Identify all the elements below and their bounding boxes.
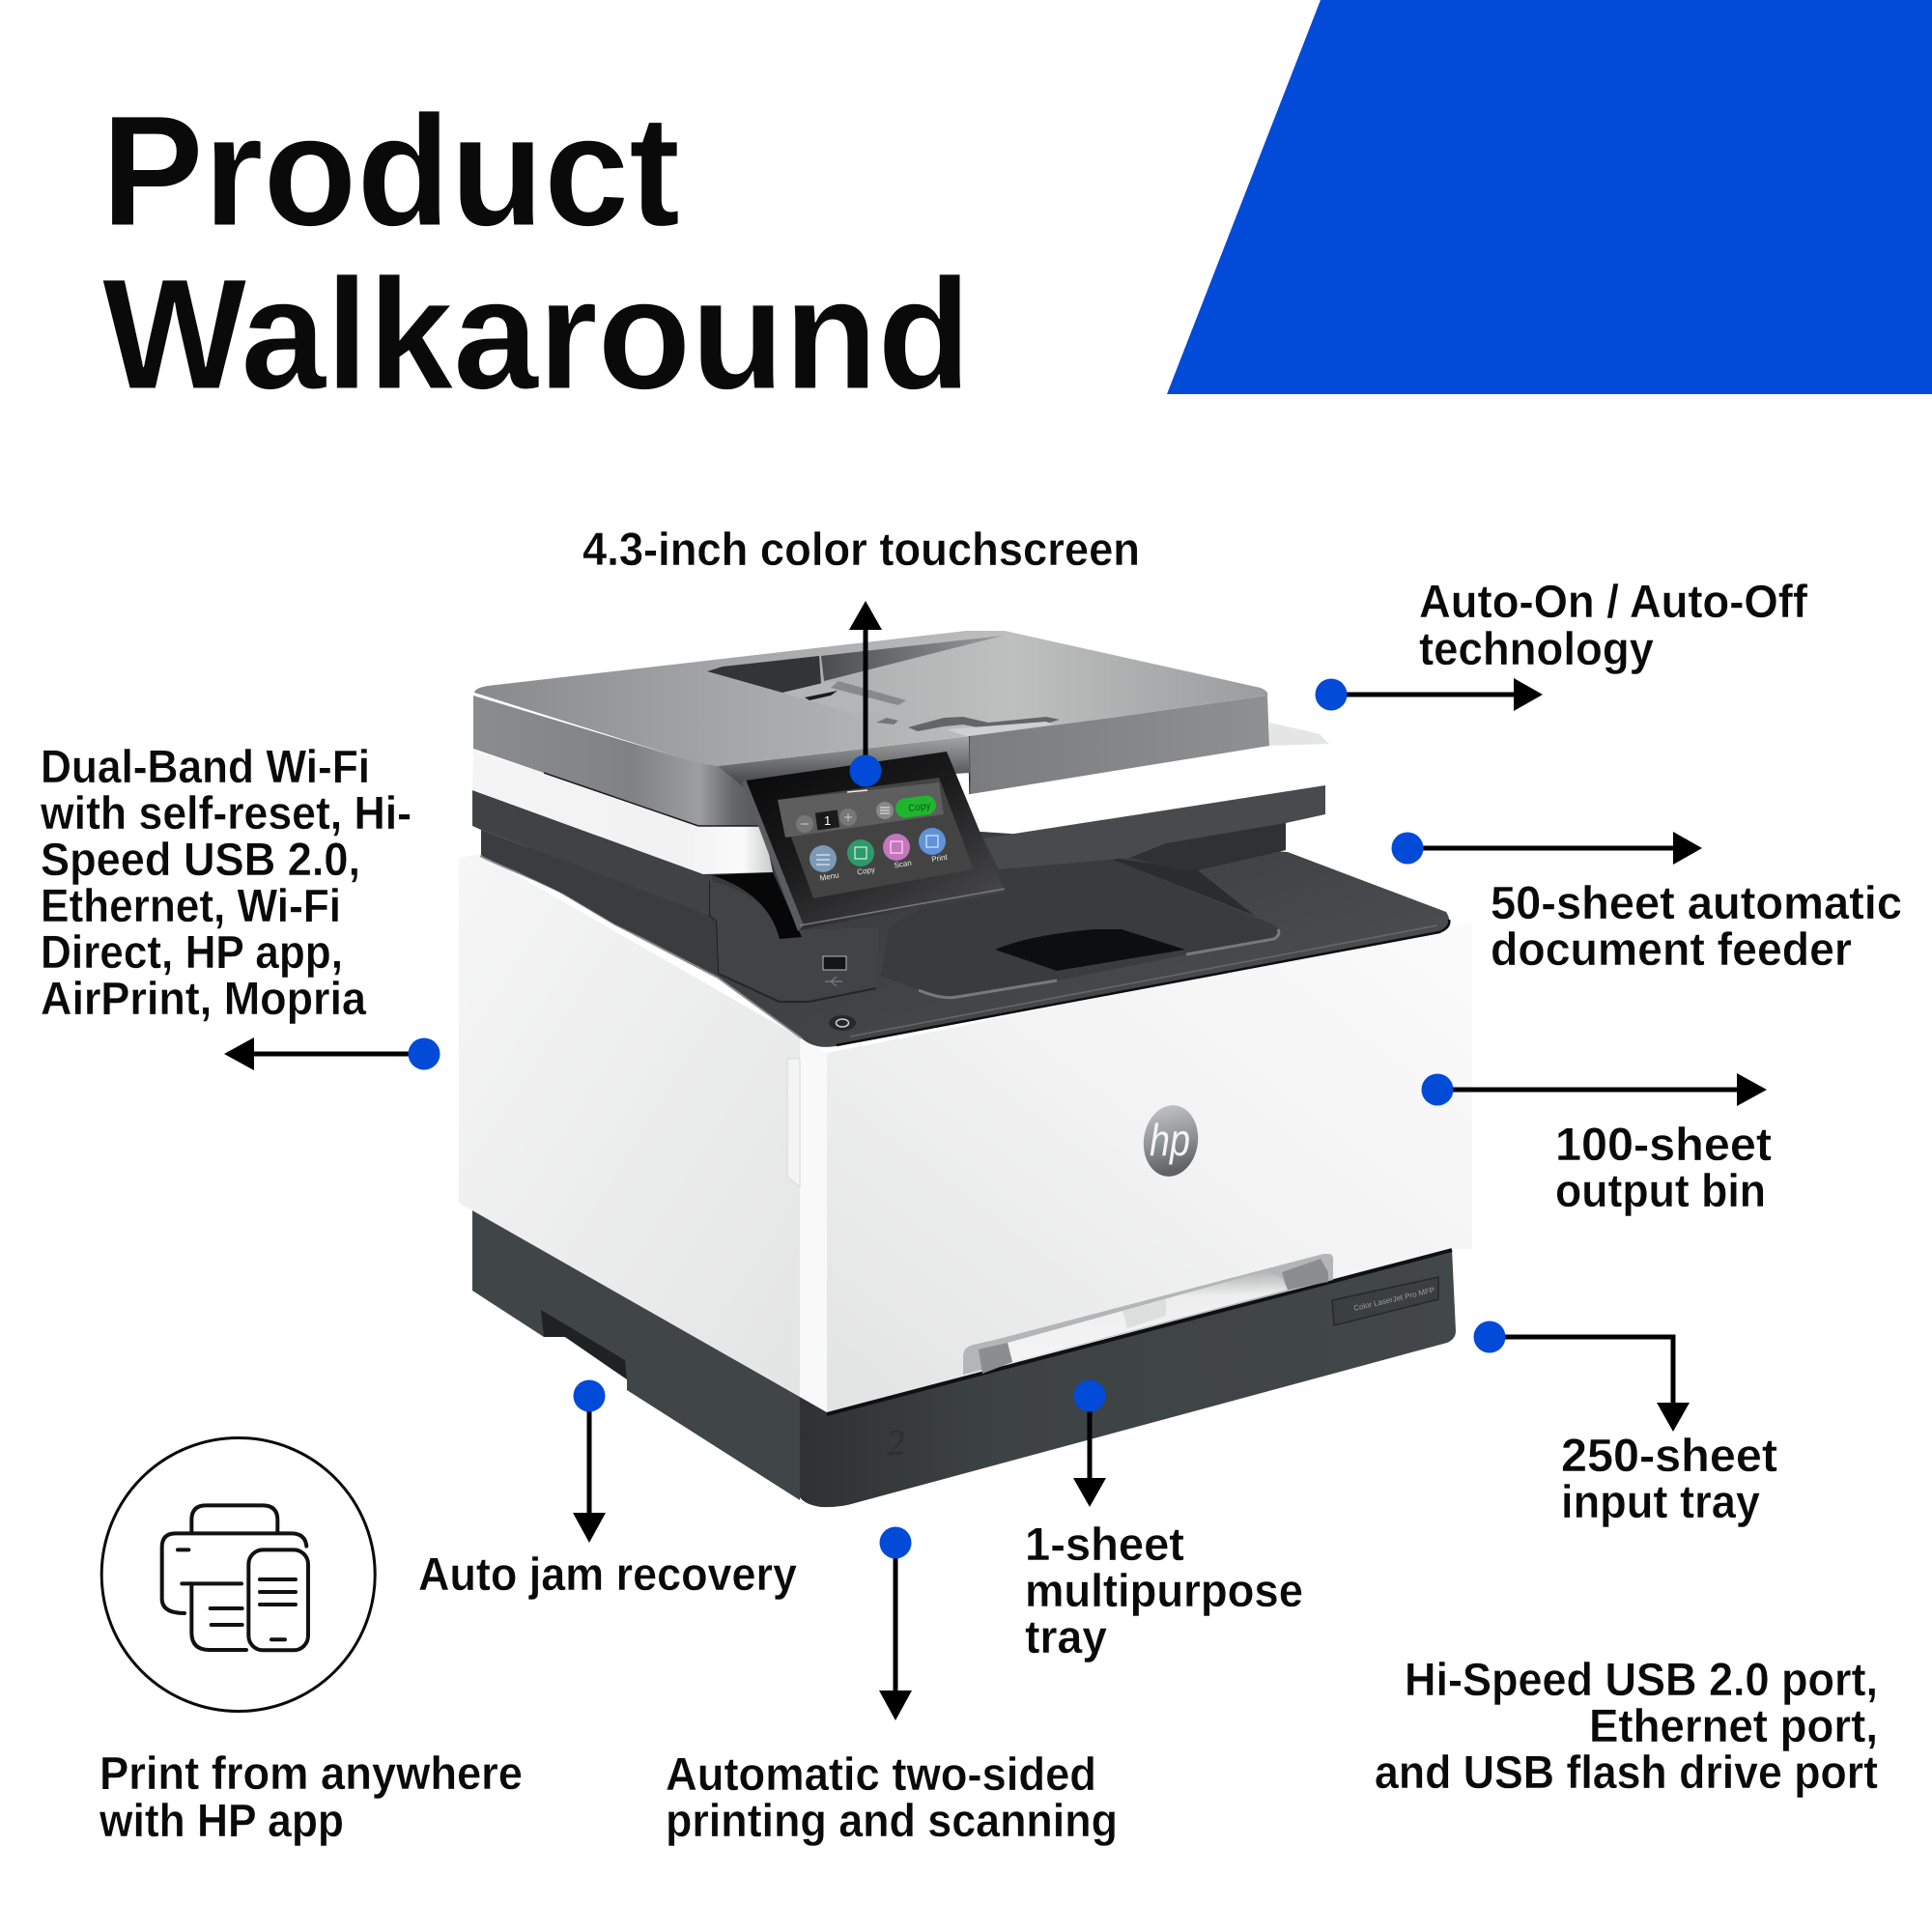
document feeder opening (707, 636, 1060, 736)
label: touchscreen: 4.3-inch color touchscreen (582, 525, 1140, 576)
label: document feeder: 50-sheet automatic (1491, 878, 1902, 929)
blue corner parallelogram (1167, 0, 1932, 394)
callout: touchscreen arrow (849, 601, 882, 786)
label: connectivity: Speed USB 2.0, (41, 835, 360, 886)
label: multipurpose tray: tray (1025, 1612, 1107, 1663)
model label on tray (1332, 1277, 1438, 1325)
printer base: left side (472, 1210, 800, 1500)
side door panel (787, 1059, 800, 1187)
label: output bin: output bin (1555, 1166, 1766, 1217)
app labels: Scan (894, 859, 912, 870)
label: multipurpose tray: 1-sheet (1025, 1520, 1184, 1571)
label: duplex: Automatic two-sided (666, 1749, 1096, 1801)
label: multipurpose tray: multipurpose (1025, 1566, 1303, 1617)
output tray (881, 857, 1279, 998)
hp logo (1139, 1101, 1203, 1180)
left band: upper (472, 790, 712, 916)
hp logo: hp (1150, 1115, 1190, 1165)
label: duplex (666, 1749, 1118, 1847)
model label on tray: Color LaserJet Pro MFP (1352, 1286, 1435, 1313)
label: input tray (1561, 1431, 1777, 1528)
label: connectivity (40, 742, 412, 1025)
title: Product (101, 82, 680, 259)
callout: auto jam arrow (573, 1379, 606, 1543)
printer body: left face (459, 854, 802, 1397)
title (101, 82, 971, 422)
scanner lid: left side (473, 696, 763, 826)
usb block (710, 881, 879, 1002)
lower dark band: right (983, 785, 1325, 870)
label: auto jam: Auto jam recovery (418, 1549, 797, 1601)
touchscreen: 1 (824, 813, 831, 828)
label: print from anywhere: with HP app (99, 1796, 344, 1847)
lid seam (969, 736, 970, 794)
label: ports: Hi-Speed USB 2.0 port, (1405, 1655, 1878, 1706)
label: print from anywhere: Print from anywhere (99, 1748, 523, 1800)
label: output bin: 100-sheet (1555, 1120, 1772, 1171)
label: connectivity: Dual-Band Wi-Fi (41, 742, 370, 793)
scanner lid: top surface (474, 631, 1267, 766)
plate front edge (837, 920, 1449, 1045)
label: print from anywhere (99, 1748, 523, 1847)
label: auto-on: Auto-On / Auto-Off (1419, 577, 1808, 628)
title: Walkaround (102, 245, 971, 422)
callout: document feeder arrow (1391, 832, 1702, 865)
screen display (778, 778, 974, 898)
printer illustration (459, 631, 1472, 1507)
label: document feeder (1491, 878, 1902, 976)
label: input tray: input tray (1561, 1477, 1760, 1528)
app labels (819, 853, 949, 883)
left band: lower (481, 830, 719, 974)
guide slot (805, 691, 838, 700)
lifting bar (947, 722, 1053, 736)
foot shadow wedge (1106, 857, 1255, 916)
printer body: front face (827, 923, 1472, 1412)
app labels: Copy (857, 865, 876, 877)
label: connectivity: Ethernet, Wi-Fi (41, 881, 341, 932)
black recess under screen (712, 872, 802, 939)
paper stop handle (995, 929, 1186, 980)
label: ports: and USB flash drive port (1375, 1747, 1878, 1799)
white band: right (971, 723, 1320, 794)
guide strip (831, 681, 906, 705)
tray number: 2 (885, 1422, 906, 1464)
callout: multipurpose tray arrow (1073, 1379, 1106, 1507)
callout: input tray arrow (1474, 1321, 1690, 1432)
printer base: front with tray (800, 1249, 1456, 1507)
paper guide ramp (782, 681, 906, 713)
app icons (810, 828, 946, 872)
app labels: Menu (819, 870, 839, 883)
white band: left (472, 751, 773, 874)
touchscreen (742, 752, 1005, 931)
green copy button (895, 794, 937, 819)
seam line (710, 881, 719, 974)
label: auto-on (1419, 577, 1808, 675)
paper notch (908, 717, 1060, 731)
callout: output bin arrow (1422, 1073, 1767, 1106)
callout: duplex arrow (879, 1526, 912, 1720)
top action bar (778, 782, 944, 838)
scanner lid: right side (969, 696, 1269, 794)
input wedge (821, 636, 1003, 681)
printer body: chamfered corner (800, 1038, 827, 1412)
label: document feeder: document feeder (1491, 924, 1852, 976)
lid bottom shadow line (544, 773, 763, 826)
plate rim (480, 856, 802, 1038)
feeder dark block (707, 656, 821, 693)
label: input tray: 250-sheet (1561, 1431, 1777, 1482)
label: duplex: printing and scanning (666, 1796, 1118, 1847)
label: connectivity: AirPrint, Mopria (41, 974, 366, 1025)
power button (829, 1015, 856, 1031)
vent marks (876, 718, 898, 724)
callout: auto-on arrow (1316, 678, 1543, 711)
label: connectivity: Direct, HP app, (41, 927, 343, 979)
label: output bin (1555, 1120, 1772, 1217)
lid front under screen (718, 736, 970, 787)
label: ports (1375, 1655, 1878, 1799)
label: auto-on: technology (1419, 624, 1654, 675)
label: connectivity: with self-reset, Hi- (40, 788, 412, 839)
green copy button: Copy (908, 801, 931, 814)
app labels: Print (931, 853, 949, 864)
icon: printer and phone in circle (101, 1437, 375, 1712)
label: multipurpose tray (1025, 1520, 1303, 1663)
multipurpose tray slot (963, 1254, 1333, 1375)
output plate (480, 821, 1449, 1047)
white tip highlight (1269, 723, 1329, 746)
label: ports: Ethernet port, (1589, 1701, 1878, 1752)
callout: connectivity arrow (224, 1037, 440, 1070)
tray seam line (827, 1250, 1452, 1414)
plate inner highlight (850, 925, 1437, 1037)
scanner foot (1129, 823, 1286, 870)
